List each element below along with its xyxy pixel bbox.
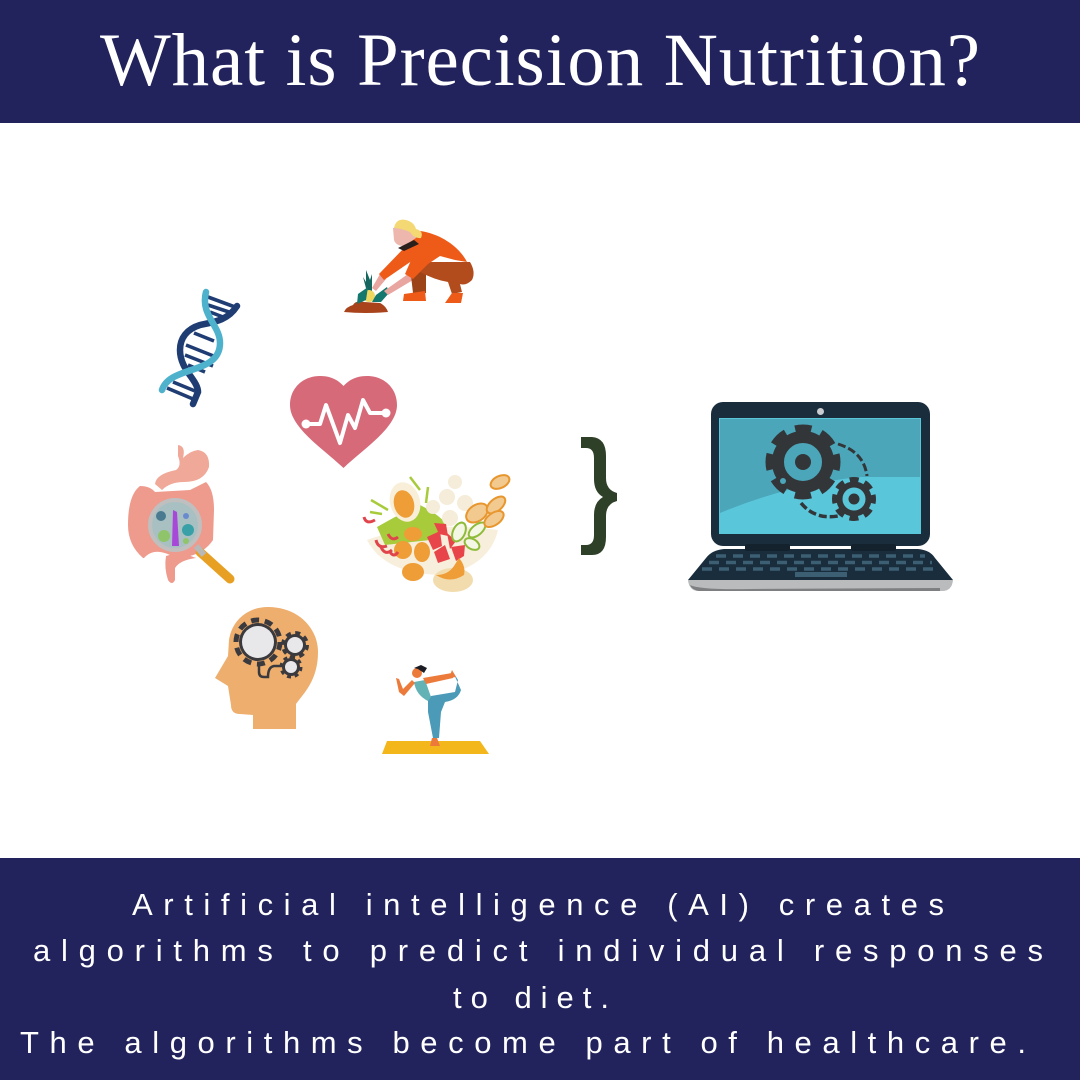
icon: DNA helix [162, 292, 237, 404]
title: What is Precision Nutrition? [100, 19, 980, 102]
keyboard base [688, 549, 953, 580]
bottom caption panel [0, 858, 1080, 1080]
icon: gut under magnifying glass [128, 445, 230, 583]
caption text: Artificial intelligence (AI) creates [132, 887, 944, 922]
curly brace [581, 437, 617, 555]
icon: head with gears [215, 607, 318, 729]
screen lid [711, 402, 930, 546]
title banner [0, 0, 1080, 123]
caption text [20, 887, 1043, 1060]
gears on screen [770, 429, 874, 518]
icon: laptop with gears [688, 402, 953, 591]
icon: yoga pose on mat [382, 665, 489, 754]
icon: farmer planting pineapple [344, 220, 474, 313]
caption text: The algorithms become part of healthcare. [20, 1025, 1026, 1060]
caption text: algorithms to predict individual responses [33, 933, 1043, 968]
caption text: to diet. [453, 980, 609, 1015]
icon: salad bowl of food [364, 472, 512, 592]
icon: heart with pulse line [290, 376, 397, 468]
